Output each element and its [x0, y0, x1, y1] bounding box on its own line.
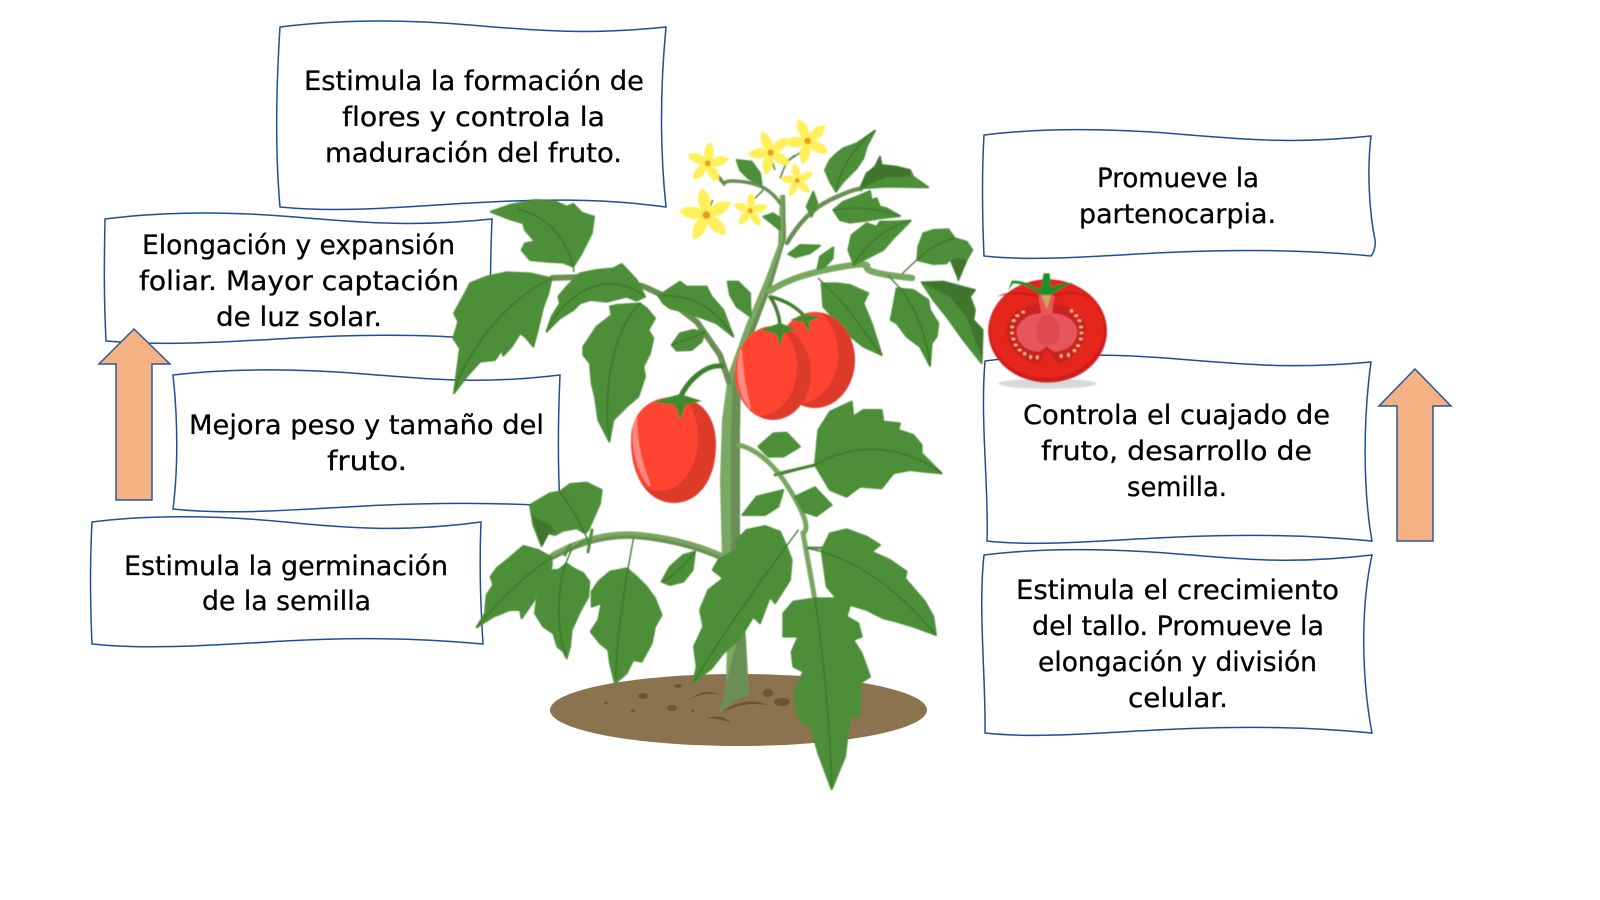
panel: flower formation: maduración del fruto. [325, 138, 622, 169]
icon: soil [550, 674, 927, 746]
panel: stem growth: celular. [1128, 683, 1228, 714]
icon: fruit stems [680, 297, 805, 398]
panel: fruit set: semilla. [1127, 472, 1227, 503]
icon: yellow flowers [675, 110, 838, 244]
panel: fruit set: Controla el cuajado de [1023, 400, 1330, 431]
leaves: upper right [728, 131, 983, 366]
panel: stem growth: del tallo. Promueve la [1032, 611, 1324, 642]
panel: flower formation [277, 21, 666, 210]
leaves: upper left [453, 200, 733, 442]
panel: leaf elongation: de luz solar. [216, 302, 382, 333]
panel: fruit weight and size: Mejora peso y tamaño del [189, 410, 544, 441]
panel: fruit set: fruto, desarrollo de [1041, 436, 1312, 467]
panel: parthenocarpy [982, 130, 1375, 258]
panel: parthenocarpy: Promueve la [1097, 163, 1259, 194]
icon: left tomato [630, 394, 717, 504]
panel: seed germination: Estimula la germinación [124, 551, 448, 582]
panel: leaf elongation: Elongación y expansión [142, 230, 455, 261]
panel: parthenocarpy: partenocarpia. [1079, 199, 1276, 230]
panel: seed germination: de la semilla [202, 586, 371, 617]
panel: fruit set [983, 355, 1372, 543]
branches [552, 175, 912, 600]
panel: flower formation: Estimula la formación de [304, 66, 644, 97]
arrow: left upward [99, 329, 170, 500]
panel: flower formation: flores y controla la [342, 102, 605, 133]
leaves: lower left [477, 483, 695, 683]
panel: seed germination [90, 517, 483, 647]
panel: stem growth: Estimula el crecimiento [1016, 575, 1339, 606]
panel: fruit weight and size: fruto. [327, 446, 407, 477]
leaves: lower right [693, 402, 942, 789]
main stem [719, 195, 786, 713]
arrow: right upward [1379, 369, 1451, 541]
panel: stem growth: elongación y división [1038, 647, 1317, 678]
icon: halved tomato [988, 273, 1107, 389]
panel: fruit weight and size [173, 370, 560, 512]
panel: leaf elongation: foliar. Mayor captación [139, 266, 459, 297]
panel: leaf elongation [104, 213, 492, 343]
panel: stem growth [982, 550, 1372, 735]
plant illustration [453, 110, 1107, 789]
icon: paired tomatoes [734, 311, 856, 421]
